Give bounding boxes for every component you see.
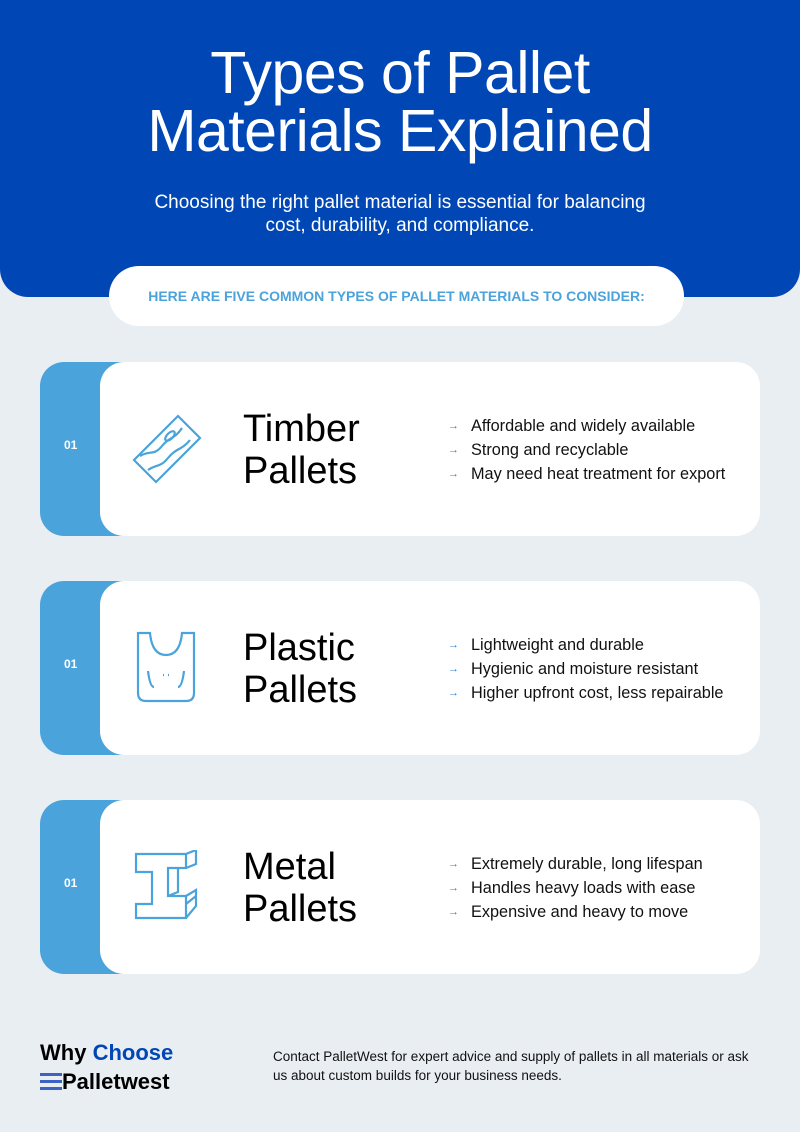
bullets: Affordable and widely available (471, 417, 695, 435)
intro pill (109, 266, 684, 326)
footer brand (40, 1040, 173, 1094)
number 3: 01 (64, 876, 77, 890)
footer brand: Why Choose (40, 1040, 173, 1065)
bullets (450, 636, 724, 702)
icon: timber (132, 414, 202, 484)
heading: Timber (243, 408, 360, 450)
heading: Pallets (243, 450, 357, 492)
title: Types of Pallet (210, 40, 590, 106)
heading: Pallets (243, 669, 357, 711)
subtitle: Choosing the right pallet material is essential for balancing (154, 192, 646, 213)
footer text: Contact PalletWest for expert advice and supply of pallets in all materials or ask us about custom builds for your business needs. (273, 1049, 748, 1083)
heading (243, 846, 357, 930)
heading: Pallets (243, 888, 357, 930)
title: Materials Explained (147, 98, 653, 164)
bullets: Lightweight and durable (471, 636, 644, 654)
subtitle: cost, durability, and compliance. (266, 215, 534, 236)
bullets (450, 855, 703, 921)
subtitle (154, 192, 646, 236)
tab 1 (40, 362, 160, 536)
tab 3 (40, 800, 160, 974)
heading: Metal (243, 846, 336, 888)
panel: plastic (100, 581, 760, 755)
logo: Palletwest (62, 1069, 170, 1094)
bullets: Strong and recyclable (471, 441, 628, 459)
number 1: 01 (64, 438, 77, 452)
heading (243, 408, 360, 492)
tab 2 (40, 581, 160, 755)
icon: plastic bag (136, 632, 196, 702)
icon: metal beam (134, 850, 198, 920)
bullets: Extremely durable, long lifespan (471, 855, 703, 873)
panel: metal (100, 800, 760, 974)
title (147, 40, 653, 164)
number 2: 01 (64, 657, 77, 671)
header (0, 0, 800, 297)
bullets: May need heat treatment for export (471, 465, 725, 483)
heading (243, 627, 357, 711)
bullets: Higher upfront cost, less repairable (471, 684, 724, 702)
bullets (450, 417, 726, 483)
heading: Plastic (243, 627, 355, 669)
bullets: Hygienic and moisture resistant (471, 660, 698, 678)
intro pill: HERE ARE FIVE COMMON TYPES OF PALLET MATERIALS TO CONSIDER: (148, 288, 645, 304)
bullets: Expensive and heavy to move (471, 903, 688, 921)
panel: timber (100, 362, 760, 536)
bullets: Handles heavy loads with ease (471, 879, 695, 897)
